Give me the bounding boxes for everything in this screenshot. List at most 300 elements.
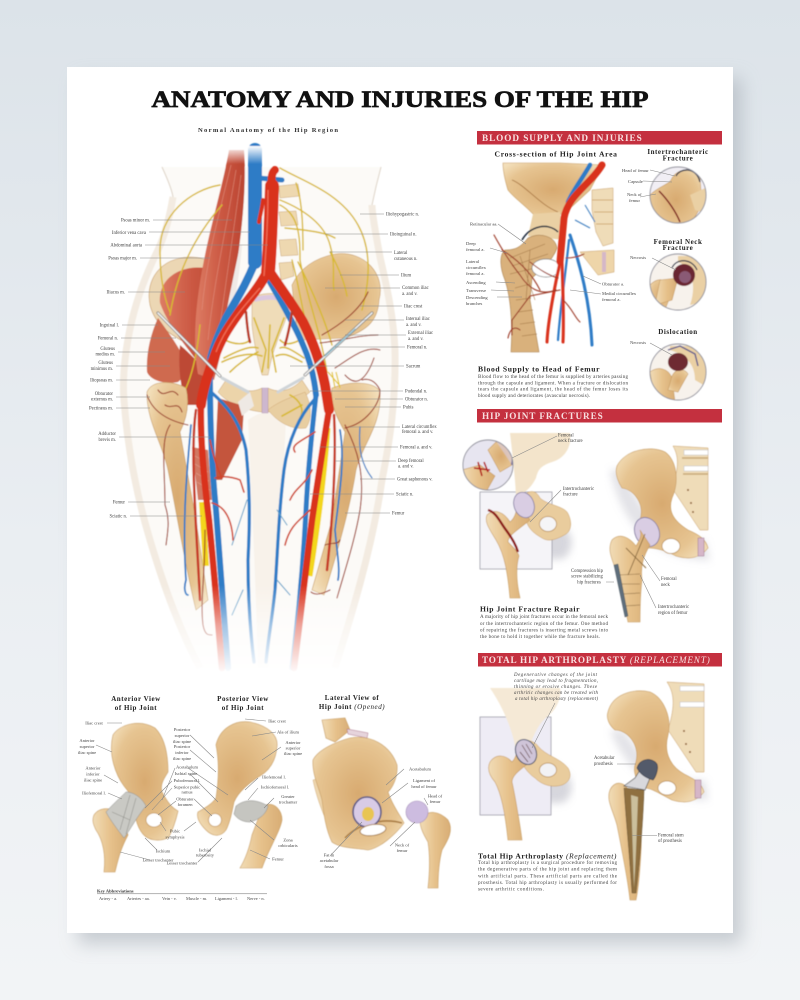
- inset labels: intertrochanteric: Neck of: [627, 192, 642, 197]
- labels: main illustration, left side: Gluteus: [98, 361, 113, 366]
- veins: [185, 150, 372, 668]
- cross-section labels: Retinacular aa.: [470, 222, 498, 226]
- cross-section labels: Lateral: [466, 259, 480, 264]
- pubic disc: [698, 538, 704, 556]
- sacral disc: [254, 295, 286, 302]
- degenerative changes note: arthritic changes can be treated with: [514, 691, 599, 696]
- arthroplasty illustration: prosthesis: [607, 682, 708, 900]
- labels: main illustration, left side: Psoas major m.: [108, 256, 137, 262]
- key abbreviations: Vein - v.: [162, 896, 177, 901]
- text block: blood supply: through the capsule and ligament. When a fracture or dislocation: [478, 380, 628, 386]
- arthroplasty labels: Femoral stem: [658, 834, 684, 838]
- section bar: hip joint fractures: [477, 409, 722, 422]
- pubic symphysis: [262, 388, 268, 413]
- section bar: blood supply and injuries: BLOOD SUPPLY AND INJURIES: [482, 133, 643, 143]
- pelvis ring: [524, 492, 571, 540]
- iliopsoas lower belly: [179, 345, 212, 405]
- screws: [626, 534, 646, 575]
- section bar: blood supply and injuries: [477, 131, 722, 144]
- labels: bottom views: femur: [430, 799, 441, 804]
- labels: main illustration, right side: Femur: [392, 512, 405, 516]
- pubic rami: [218, 380, 310, 412]
- sacral nerve plexus: [222, 318, 304, 418]
- degenerative changes note: Degenerative changes of the joint: [513, 673, 598, 678]
- labels: main illustration, left side: [89, 218, 268, 520]
- view titles: Posterior View: [217, 695, 269, 703]
- upper pelvis fading: [490, 688, 560, 752]
- degenerative changes note: [513, 673, 599, 748]
- inset: femoral neck fracture: [650, 254, 712, 312]
- cross-section of hip joint: [494, 163, 614, 352]
- labels: bottom views: [78, 718, 443, 869]
- cross-section labels: femoral a.: [466, 247, 485, 252]
- arthroplasty labels: prosthesis: [594, 762, 613, 767]
- aortic highlight: [216, 190, 268, 352]
- labels: bottom views: Greater: [281, 794, 295, 799]
- labels: main illustration, left side: Iliopsoas m.: [90, 378, 113, 384]
- cross-section labels: Descending: [466, 295, 488, 300]
- heading: dislocation: Dislocation: [658, 328, 698, 336]
- ischial dark rim: [345, 821, 402, 838]
- labels: main illustration, right side: Ilium: [401, 274, 412, 278]
- view titles: of Hip Joint: [222, 704, 264, 712]
- fracture labels: Intertrochanteric: [658, 605, 689, 610]
- inner thigh tone: [248, 412, 286, 668]
- sciatic nerves: [202, 502, 206, 566]
- labels: main illustration, left side: externus m.: [91, 398, 113, 402]
- labels: main illustration, right side: Internal iliac: [406, 317, 430, 322]
- heading: intertrochanteric fracture: Fracture: [663, 154, 693, 162]
- femoral head: [630, 513, 664, 551]
- labels: main illustration, right side: cutaneous n.: [394, 257, 417, 262]
- heading: cross-section: Cross-section of Hip Joint Area: [494, 150, 618, 158]
- arthroplasty labels: Acetabular: [594, 756, 615, 761]
- labels: main illustration, left side: Gluteus: [100, 347, 115, 352]
- labels: bottom views: Iliofemoral l.: [82, 790, 106, 796]
- sacrum: [592, 188, 613, 246]
- labels: bottom views: inferior: [86, 772, 100, 776]
- sacrum: [672, 446, 708, 530]
- poster sheet: [67, 67, 733, 933]
- inset labels: dislocation: [630, 340, 672, 355]
- key abbreviations: Ligament - l.: [215, 896, 238, 901]
- shadow: [530, 515, 572, 559]
- labels: bottom views: foramen: [178, 802, 193, 807]
- text block: blood supply: tears the capsule and ligament, the head of the femur loses its: [478, 386, 628, 392]
- fracture labels: neck: [661, 583, 671, 588]
- arthroplasty illustration: degenerated hip: [480, 688, 572, 840]
- labels: bottom views: Ischium: [156, 848, 171, 854]
- right pelvic floor bone: [268, 392, 310, 428]
- text block: total hip arthroplasty: [478, 852, 618, 892]
- labels: main illustration, right side: Ilioinguinal n.: [390, 232, 417, 238]
- labels: main illustration, right side: Iliac crest: [404, 304, 423, 310]
- inset labels: intertrochanteric: [622, 168, 675, 203]
- section bar: hip joint fractures: HIP JOINT FRACTURES: [482, 411, 604, 421]
- body tone: [123, 167, 395, 668]
- labels: main illustration, left side: Iliacus m.: [106, 290, 125, 296]
- text block: hip joint fracture repair: [480, 604, 608, 640]
- obturator foramen: [208, 814, 222, 826]
- acetabular cup: [637, 759, 658, 780]
- femur: [489, 744, 530, 840]
- labels: bottom views: Pubofemoral l.: [174, 778, 200, 783]
- fracture labels: fracture: [563, 492, 578, 498]
- fracture labels: region of femur: [658, 611, 688, 616]
- pelvis: [313, 737, 404, 850]
- degenerative changes note: cartilage may lead to fragmentation,: [514, 679, 598, 684]
- fracture labels: [512, 434, 689, 616]
- labels: main illustration, left side: Sciatic n.: [110, 514, 127, 520]
- obturator foramen: [658, 781, 676, 795]
- view titles: [111, 694, 385, 712]
- heading: intertrochanteric fracture: Intertrochanteric: [647, 148, 709, 156]
- labels: main illustration, right side: Pudendal n.: [405, 390, 427, 394]
- fracture labels: Femoral: [558, 434, 574, 438]
- labels: bottom views: Posterior: [174, 744, 191, 749]
- labels: main illustration, right side: Lateral: [394, 251, 408, 256]
- labels: bottom views: femur: [397, 848, 408, 853]
- labels: bottom views: Iliac crest: [85, 720, 104, 726]
- necrotic head: [673, 264, 695, 286]
- sacrum: [667, 682, 704, 772]
- key abbreviations: Key Abbreviations: [97, 888, 134, 894]
- key abbreviations: Artery - a.: [99, 896, 117, 901]
- labels: bottom views: Femur: [272, 856, 284, 862]
- cross-section labels: Obturator a.: [602, 282, 624, 286]
- labels: bottom views: Ligament of: [413, 778, 436, 783]
- ilium lower: [528, 212, 564, 240]
- ilium and pubis: [616, 449, 708, 558]
- labels: bottom views: Head of: [428, 794, 443, 798]
- inset: intertrochanteric fracture: [649, 166, 707, 224]
- labels: bottom views: iliac spine: [173, 756, 191, 761]
- labels: main illustration, right side: Sacrum: [406, 364, 421, 370]
- body outline: [123, 167, 395, 668]
- labels: main illustration, left side: brevis m.: [99, 438, 116, 443]
- capsule ring near joint: [532, 259, 560, 277]
- labels: main illustration, right side: Obturator n.: [405, 398, 428, 402]
- upper pelvis fading: [510, 433, 570, 495]
- heading: femoral neck fracture: Femoral Neck: [654, 238, 702, 246]
- text block: hip joint fracture repair: or the intertrochanteric region of the femur. One method: [480, 620, 608, 627]
- ridge line on ilium: [512, 180, 558, 212]
- view titles: of Hip Joint: [115, 704, 157, 712]
- inset labels: femoral neck: Necrosis: [630, 255, 646, 260]
- fracture labels: Compression hip: [571, 569, 604, 574]
- sacrum: [252, 294, 288, 375]
- text block: blood supply: blood supply and deteriorates (avascular necrosis).: [478, 392, 590, 399]
- text block: blood supply: Blood Supply to Head of Femur: [478, 364, 600, 374]
- text block: total hip arthroplasty: prosthesis. Total hip arthroplasty is usually performed for: [478, 879, 617, 886]
- shadow: [530, 760, 572, 803]
- labels: main illustration, right side: a. and v.: [398, 464, 414, 470]
- enlargement box: [480, 717, 551, 815]
- cross-section labels: Medial circumflex: [602, 291, 637, 296]
- labels: main illustration, right side: femoral a. and v.: [402, 430, 433, 435]
- arteries: [193, 170, 335, 668]
- arthroplasty labels: of prosthesis: [658, 839, 682, 844]
- labels: main illustration, right side: a. and v.: [406, 323, 422, 328]
- worn femoral head: [511, 736, 541, 768]
- labels: bottom views: Acetabulum: [176, 764, 198, 770]
- femur: [93, 809, 128, 872]
- anterior view of hip joint: [93, 723, 178, 872]
- blood vessels: [568, 165, 590, 202]
- degenerative changes note: a total hip arthroplasty (replacement): [515, 697, 598, 702]
- text block: blood supply: Blood flow to the head of the femur is supplied by arteries passing: [478, 373, 628, 380]
- labels: main illustration, right side: Great saphenous v.: [397, 478, 432, 482]
- cross-section labels: branches: [466, 301, 483, 306]
- labels: bottom views: Superior pubic: [174, 784, 200, 790]
- key abbreviations: Arteries - aa.: [127, 896, 150, 901]
- compression plate: [614, 564, 628, 617]
- text block: total hip arthroplasty: Total hip arthroplasty is a surgical procedure for removing: [478, 859, 617, 866]
- labels: bottom views: Ischial spine: [175, 771, 197, 776]
- labels: main illustration, left side: Femoral n.: [98, 336, 118, 342]
- bones: [650, 170, 702, 230]
- femur cross-section: [501, 235, 557, 352]
- heading: femoral neck fracture: Fracture: [663, 244, 693, 252]
- right iliac bone: [292, 254, 380, 340]
- text block: blood supply: [478, 364, 628, 399]
- iliacus muscle: [160, 267, 221, 372]
- view titles: Hip Joint (Opened): [319, 703, 385, 711]
- labels: bottom views: superior: [175, 733, 190, 738]
- capsule: [106, 792, 146, 838]
- view titles: Anterior View: [111, 695, 161, 703]
- lateral thigh muscle: [147, 318, 190, 383]
- femur: [420, 812, 450, 888]
- title: ANATOMY AND INJURIES OF THE HIP: [152, 87, 648, 112]
- labels: bottom views: Lesser trochanter: [166, 860, 198, 866]
- inset labels: femoral neck: [630, 255, 676, 270]
- left iliac rim: [149, 257, 225, 345]
- femur: [609, 783, 642, 900]
- white psoas tendon: [225, 245, 242, 322]
- fracture illustration: left: [462, 433, 572, 598]
- labels: bottom views: Posterior: [174, 727, 191, 732]
- text block: total hip arthroplasty: severe arthritic conditions.: [478, 886, 544, 892]
- labels: bottom views: trochanter: [279, 800, 298, 804]
- labels: main illustration, right side: a. and v.: [408, 337, 424, 342]
- cross-section labels: femoral a.: [466, 271, 485, 276]
- femur: [610, 530, 650, 622]
- obturator foramen: [146, 813, 162, 827]
- labels: bottom views: Acetabulum: [409, 766, 431, 772]
- nerve stubs near hip: [328, 372, 340, 388]
- pubic disc: [695, 780, 701, 798]
- posterior view of hip joint: [197, 722, 282, 868]
- necrotic head: [668, 353, 688, 371]
- labels: main illustration, left side: Pectineus m.: [89, 406, 113, 412]
- magnifier circle: [462, 440, 514, 495]
- labels: bottom views: ramus: [182, 790, 193, 794]
- degenerative changes note: thinning or erosive changes. These: [514, 685, 598, 690]
- labels: bottom views: Neck of: [395, 842, 410, 848]
- labels: bottom views: Fat in: [324, 852, 335, 858]
- labels: main illustration, right side: Common iliac: [402, 286, 429, 291]
- labels: bottom views: inferior: [175, 750, 189, 755]
- femur: [486, 500, 530, 598]
- inset labels: intertrochanteric: femur: [629, 198, 640, 203]
- cross-section labels: [466, 222, 637, 306]
- ilium: [503, 163, 603, 216]
- fat in acetabular fossa: [362, 807, 374, 821]
- lumbar vertebrae: [279, 184, 300, 280]
- capsule: [234, 801, 268, 822]
- femur: [240, 804, 282, 868]
- labels: main illustration, left side: Inferior vena cava: [112, 231, 147, 236]
- arthroplasty labels: [594, 756, 684, 844]
- labels: bottom views: fossa: [324, 864, 334, 869]
- fracture labels: hip fractures: [577, 580, 601, 586]
- ilium and pubis: [111, 723, 178, 840]
- labels: bottom views: superior: [286, 746, 301, 750]
- labels: bottom views: Pubic: [170, 828, 180, 834]
- disc: [347, 729, 368, 738]
- fracture line: [659, 191, 680, 222]
- labels: bottom views: tuberosity: [196, 852, 215, 858]
- text block: total hip arthroplasty: Total Hip Arthroplasty (Replacement): [478, 852, 617, 860]
- text block: total hip arthroplasty: the degenerative parts of the hip joint and replacing them: [478, 866, 617, 872]
- labels: main illustration, right side: [290, 212, 437, 516]
- lumbar and abdominal nerves: [160, 168, 368, 388]
- labels: bottom views: Ala of ilium: [277, 730, 299, 734]
- key abbreviations: [97, 888, 267, 901]
- femoral head: [510, 489, 538, 521]
- subtitle: normal anatomy: Normal Anatomy of the Hip Region: [198, 127, 338, 134]
- main illustration: normal anatomy of the hip region: [120, 146, 400, 675]
- top fade: [200, 146, 300, 164]
- cross-section labels: Transverse: [466, 288, 486, 293]
- pectineus white tendon: [238, 392, 254, 416]
- labels: bottom views: Iliac crest: [268, 718, 287, 724]
- obturator opening: [359, 823, 387, 837]
- right femur: [312, 383, 380, 595]
- intertrochanteric fracture line: [488, 510, 518, 552]
- fracture labels: screw stabilizing: [571, 574, 603, 580]
- section bar: total hip arthroplasty: [478, 653, 722, 666]
- acetabulum: [353, 797, 381, 827]
- labels: bottom views: symphysis: [165, 834, 185, 840]
- labels: bottom views: Obturator: [176, 796, 194, 802]
- arterial branches: [147, 292, 380, 635]
- labels: bottom views: iliac spine: [78, 750, 96, 755]
- labels: bottom views: Zona: [283, 838, 293, 842]
- labels: main illustration, left side: Psoas minor m.: [121, 218, 150, 224]
- labels: main illustration, right side: Sciatic n.: [396, 492, 413, 498]
- acetabulum capsule: [522, 226, 558, 240]
- labels: bottom views: iliac spine: [84, 778, 102, 782]
- labels: main illustration, left side: Obturator: [95, 392, 113, 397]
- femoral stem: [624, 788, 644, 893]
- labels: bottom views: Anterior: [85, 766, 101, 770]
- labels: main illustration, right side: Femoral n.: [407, 346, 427, 350]
- labels: bottom views: Anterior: [79, 738, 95, 743]
- obturator foramen: [540, 516, 556, 532]
- labels: main illustration, left side: medius m.: [95, 352, 115, 358]
- silver retractors at inguinal ligaments: [158, 313, 372, 392]
- labels: main illustration, right side: Deep femoral: [398, 459, 424, 464]
- pectineus and adductor: [214, 398, 244, 480]
- cross-section labels: Ascending: [466, 280, 486, 285]
- labels: main illustration, left side: Adductor: [98, 432, 116, 437]
- fracture labels: neck fracture: [558, 439, 583, 444]
- ilium and ischium: [197, 722, 277, 835]
- cross-section labels: Deep: [466, 241, 476, 246]
- labels: bottom views: acetabular: [320, 858, 339, 863]
- capsule arc: [676, 170, 700, 182]
- branch arteries to the femur: [494, 235, 584, 338]
- left femur: [147, 382, 208, 610]
- pubis: [580, 250, 614, 275]
- text block: hip joint fracture repair: the bone to hold it together while the fracture heals.: [480, 633, 600, 640]
- lateral view of hip joint: [313, 718, 450, 888]
- labels: bottom views: Ischial: [199, 848, 212, 852]
- sacrum fragment: [322, 718, 350, 742]
- text block: hip joint fracture repair: A majority of hip joint fractures occur in the femoral neck: [480, 613, 608, 620]
- labels: bottom views: Anterior: [285, 740, 301, 745]
- view titles: Lateral View of: [325, 694, 379, 702]
- inset: dislocation: [650, 344, 712, 402]
- ilium and pubis: [607, 691, 704, 802]
- key abbreviations: Nerve - n.: [247, 896, 265, 901]
- pubic disc: [602, 252, 606, 272]
- poster shadow: [78, 78, 742, 944]
- text block: hip joint fracture repair: of repairing the fractures is inserting metal screws into: [480, 626, 608, 634]
- obturator foramen: [540, 763, 556, 777]
- labels: main illustration, right side: External iliac: [408, 331, 433, 336]
- spongy bone texture: [510, 244, 548, 336]
- labels: main illustration, right side: a. and v.: [402, 292, 418, 297]
- labels: main illustration, left side: minimus m.: [91, 367, 113, 372]
- femoral head: [406, 801, 428, 823]
- labels: bottom views: orbicularis: [278, 843, 298, 848]
- labels: bottom views: iliac spine: [284, 751, 302, 756]
- enlargement box: [480, 492, 552, 569]
- key abbreviations: Muscle - m.: [186, 896, 207, 901]
- torn capsule: [668, 346, 698, 366]
- obturator foramen: [662, 538, 680, 554]
- left psoas muscle: [195, 150, 245, 380]
- fracture labels: Intertrochanteric: [563, 487, 594, 492]
- text block: hip joint fracture repair: Hip Joint Fracture Repair: [480, 604, 580, 614]
- thigh branch arteries: [210, 432, 315, 545]
- cross-section labels: femoral a.: [602, 297, 621, 302]
- inset labels: intertrochanteric: Capsule: [628, 179, 643, 184]
- coccyx: [313, 778, 333, 824]
- flank bands: [123, 197, 200, 668]
- inset labels: dislocation: Necrosis: [630, 340, 646, 345]
- labels: bottom views: Lesser trochanter: [142, 858, 174, 862]
- fracture labels: Femoral: [661, 577, 677, 582]
- labels: main illustration, right side: Pubis: [403, 406, 414, 410]
- labels: bottom views: iliac spine: [173, 739, 191, 744]
- cross-section labels: circumflex: [466, 265, 487, 270]
- prosthesis neck and collar: [624, 770, 650, 790]
- bottom fade of the legs: [120, 585, 400, 675]
- text block: total hip arthroplasty: with artificial parts. These artificial parts are called the: [478, 872, 618, 880]
- labels: main illustration, right side: Lateral circumflex: [402, 425, 437, 430]
- labels: main illustration, left side: Abdominal aorta: [110, 244, 143, 248]
- section bar: total hip arthroplasty: TOTAL HIP ARTHROPLASTY (REPLACEMENT): [482, 655, 711, 665]
- sacral veins: [575, 205, 595, 228]
- fracture illustration: right: [610, 446, 710, 622]
- labels: bottom views: superior: [80, 744, 95, 749]
- pelvis ring: [516, 741, 570, 786]
- shadow: [610, 730, 708, 800]
